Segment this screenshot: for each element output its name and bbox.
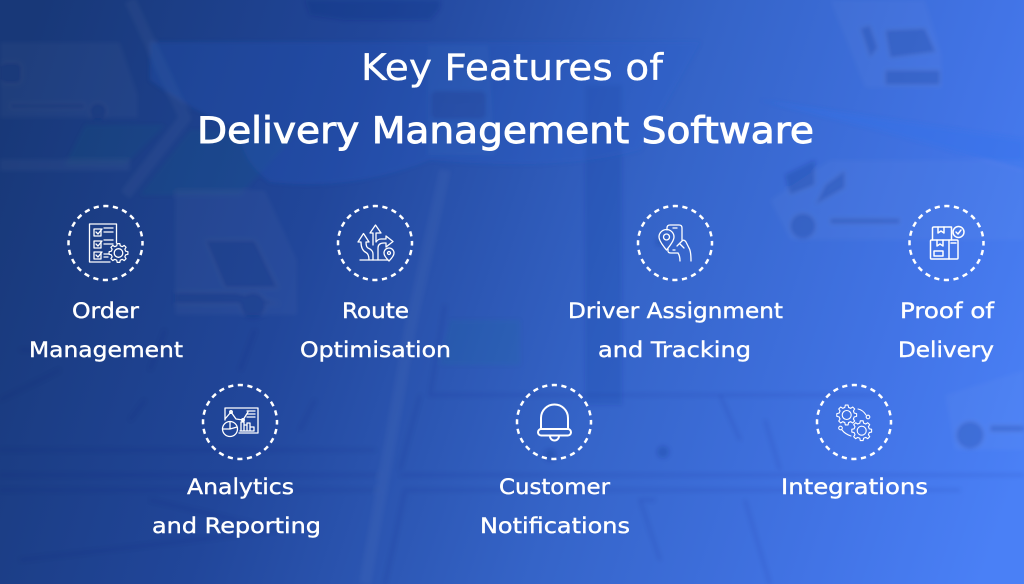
icon: branching route arrows	[338, 206, 412, 280]
feature: Customer Notifications	[480, 385, 630, 539]
background vans	[0, 0, 1024, 461]
label: and Tracking	[598, 338, 751, 363]
label	[898, 299, 994, 363]
label: and Reporting	[152, 514, 321, 539]
feature: Proof of Delivery	[898, 206, 994, 363]
feature: Order Management	[29, 206, 183, 363]
icon: bell	[517, 385, 591, 459]
feature: Driver Assignment and Tracking	[568, 206, 783, 363]
central dark road	[585, 85, 622, 405]
title	[197, 46, 814, 152]
label: Customer	[499, 475, 610, 500]
feature: Route Optimisation	[300, 206, 451, 363]
label: Notifications	[480, 514, 630, 539]
label	[300, 299, 451, 363]
label: Optimisation	[300, 338, 451, 363]
label	[152, 475, 321, 539]
label: Proof of	[900, 299, 994, 324]
feature: Integrations	[781, 385, 928, 500]
label	[568, 299, 783, 363]
green map blocks	[65, 125, 520, 365]
title: Key Features of	[361, 46, 664, 89]
feature: Analytics and Reporting	[152, 385, 321, 539]
label: Integrations	[781, 475, 928, 500]
icon: checklist with gear	[68, 206, 142, 280]
label: Driver Assignment	[568, 299, 783, 324]
label	[480, 475, 630, 539]
water and bright bands	[150, 42, 700, 184]
icon: phone with location pin and hand	[638, 206, 712, 280]
label: Order	[72, 299, 139, 324]
label: Analytics	[187, 475, 294, 500]
icon: packages with check mark	[910, 206, 984, 280]
icon: two linked gears	[817, 385, 891, 459]
label: Management	[29, 338, 183, 363]
roads	[0, 0, 445, 584]
label	[29, 299, 183, 363]
label: Delivery	[898, 338, 994, 363]
label: Route	[342, 299, 409, 324]
title: Delivery Management Software	[197, 109, 814, 152]
icon: analytics dashboard	[203, 385, 277, 459]
